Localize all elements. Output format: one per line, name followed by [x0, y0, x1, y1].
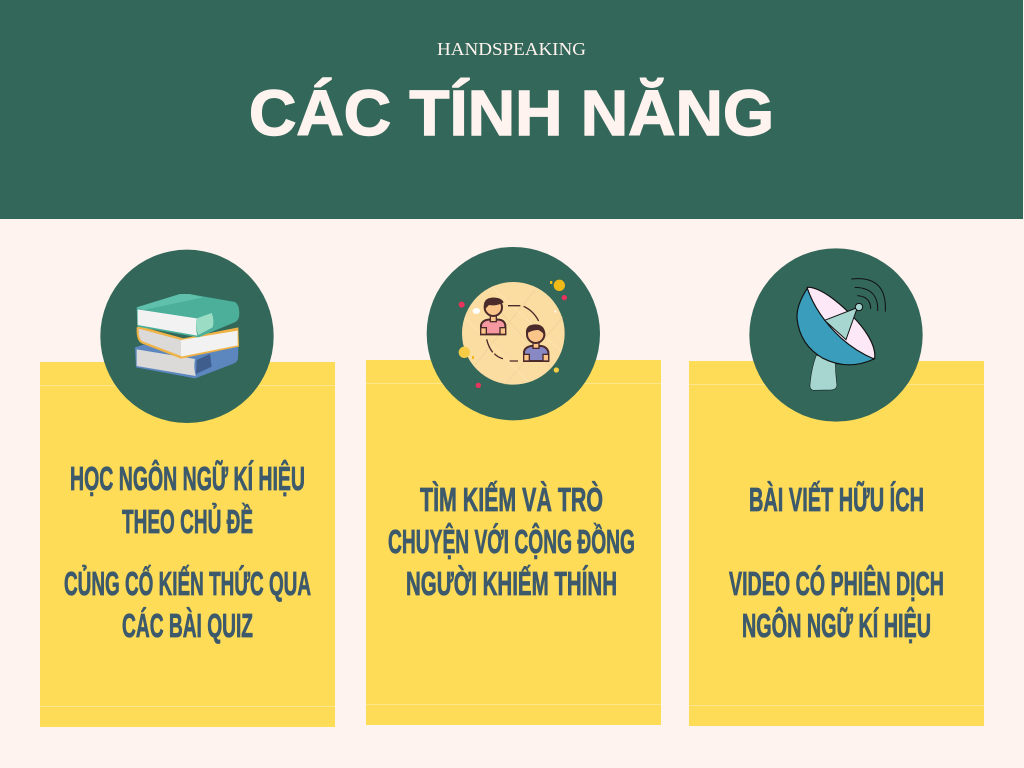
- person: blue shirt: [524, 324, 549, 361]
- text: community features: TÌM KIẾM VÀ TRÒ: [420, 481, 603, 518]
- text: learning features: CỦNG CỐ KIẾN THỨC QUA: [64, 564, 311, 602]
- text: learning features: CÁC BÀI QUIZ: [122, 607, 253, 644]
- brand name: HANDSPEAKING: [437, 39, 586, 59]
- text: learning features: [64, 459, 311, 644]
- panel: articles: [689, 361, 984, 726]
- icon: books: [100, 250, 274, 423]
- panel: learning: [40, 362, 335, 727]
- header banner: [0, 0, 1023, 219]
- confetti dots: [459, 280, 567, 388]
- title: CÁC TÍNH NĂNG: [249, 77, 774, 149]
- text: learning features: HỌC NGÔN NGỮ KÍ HIỆU: [70, 459, 305, 497]
- text: community features: NGƯỜI KHIẾM THÍNH: [406, 565, 617, 602]
- dashed cycle arrows: [487, 306, 539, 361]
- text: community features: [388, 481, 635, 602]
- icon: people chatting: [427, 247, 600, 420]
- icon: satellite dish: [749, 248, 923, 422]
- panel: community: [366, 360, 661, 725]
- person: pink shirt: [481, 298, 506, 334]
- text: article features: [729, 481, 944, 644]
- text: learning features: THEO CHỦ ĐỀ: [122, 503, 253, 540]
- text: community features: CHUYỆN VỚI CỘNG ĐỒNG: [388, 522, 635, 560]
